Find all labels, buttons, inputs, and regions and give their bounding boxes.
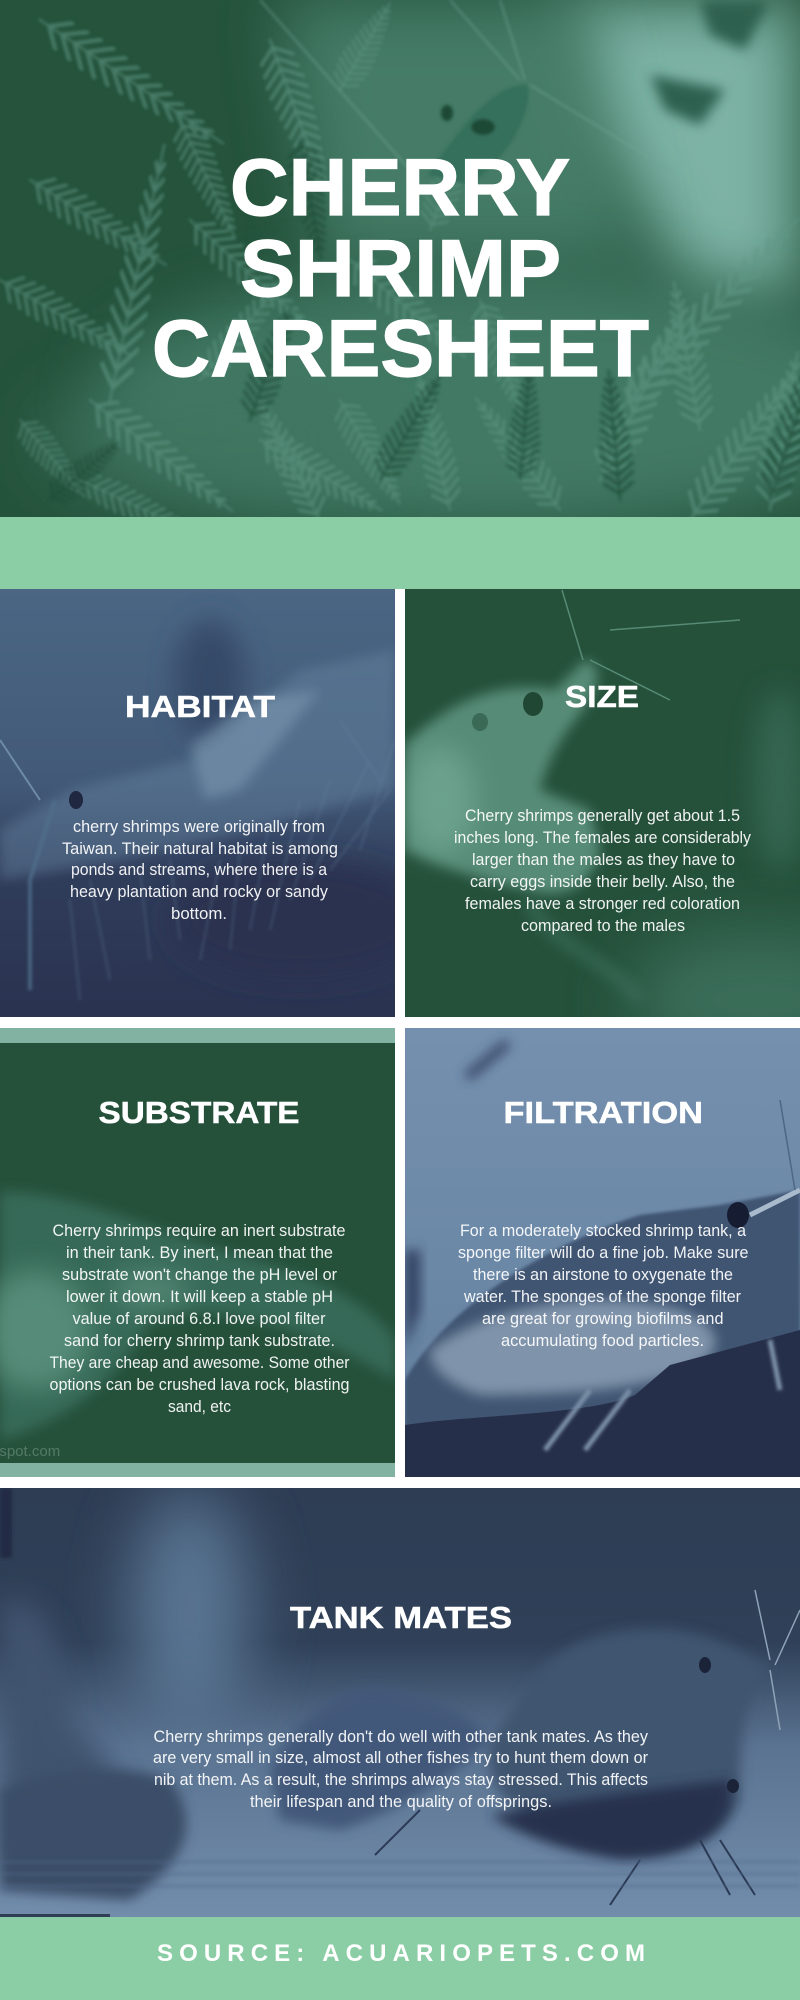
panel: filtration — [405, 1028, 800, 1477]
panel: tank mates — [0, 1488, 800, 1917]
text: substrate body: value of around 6.8.I love pool filter — [72, 1309, 326, 1328]
text: habitat body: ponds and streams, where there is a — [71, 860, 328, 879]
text: substrate body: options can be crushed lava rock, blasting — [50, 1375, 350, 1394]
title: CHERRY — [230, 143, 570, 233]
text: habitat body: bottom. — [171, 904, 227, 923]
text: filtration body: For a moderately stocked shrimp tank, a — [460, 1221, 747, 1240]
green band — [0, 517, 800, 589]
text: substrate body: in their tank. By inert, I mean that the — [66, 1243, 333, 1262]
title: CARESHEET — [152, 304, 649, 394]
text: size body: larger than the males as they have to — [472, 850, 735, 869]
text: tank mates body: are very small in size, almost all other fishes try to hunt them down or — [153, 1748, 648, 1767]
heading: filtration: FILTRATION — [504, 1095, 703, 1130]
panel: size — [405, 589, 800, 1017]
heading: habitat: HABITAT — [125, 689, 275, 724]
title: SHRIMP — [240, 224, 561, 314]
text: size body: females have a stronger red coloration — [465, 894, 740, 913]
text: filtration body: water. The sponges of the sponge filter — [463, 1287, 741, 1306]
text: substrate body — [50, 1221, 350, 1416]
title — [152, 143, 649, 394]
text: habitat body: Taiwan. Their natural habitat is among — [62, 839, 338, 858]
text: substrate body: Cherry shrimps require an inert substrate — [52, 1221, 346, 1240]
text: substrate body: sand for cherry shrimp tank substrate. — [64, 1331, 335, 1350]
text: tank mates body: Cherry shrimps generally don't do well with other tank mates. As they — [154, 1727, 648, 1746]
text: habitat body: heavy plantation and rocky or sandy — [70, 882, 328, 901]
panel: hero header — [0, 0, 800, 548]
text: filtration body — [458, 1221, 748, 1350]
text: tank mates body: nib at them. As a result, the shrimps always stay stressed. This affects — [154, 1770, 648, 1789]
text: habitat body: cherry shrimps were originally from — [73, 817, 325, 836]
heading: tank mates: TANK MATES — [290, 1600, 512, 1635]
text: tank mates body — [153, 1727, 648, 1811]
source line: SOURCE: ACUARIOPETS.COM — [157, 1940, 645, 1967]
heading: size: SIZE — [565, 679, 639, 714]
text: filtration body: there is an airstone to oxygenate the — [473, 1265, 733, 1284]
text: size body: Cherry shrimps generally get about 1.5 — [465, 806, 740, 825]
panel: habitat — [0, 589, 430, 1017]
footer band — [0, 1917, 800, 2000]
text: size body: inches long. The females are considerably — [454, 828, 751, 847]
text: filtration body: are great for growing biofilms and — [482, 1309, 724, 1328]
text: substrate body: lower it down. It will keep a stable pH — [66, 1287, 333, 1306]
text: habitat body — [62, 817, 338, 923]
text: size body: compared to the males — [521, 916, 685, 935]
text: tank mates body: their lifespan and the quality of offsprings. — [250, 1792, 552, 1811]
text: substrate body: substrate won't change the pH level or — [62, 1265, 337, 1284]
text: filtration body: sponge filter will do a fine job. Make sure — [458, 1243, 748, 1262]
panel: substrate — [0, 1028, 395, 1477]
heading: substrate: SUBSTRATE — [98, 1095, 300, 1130]
text: substrate body: They are cheap and awesome. Some other — [50, 1353, 350, 1372]
text: size body — [454, 806, 751, 935]
text: substrate body: sand, etc — [168, 1397, 231, 1416]
text: size body: carry eggs inside their belly. Also, the — [470, 872, 735, 891]
text: filtration body: accumulating food particles. — [501, 1331, 704, 1350]
